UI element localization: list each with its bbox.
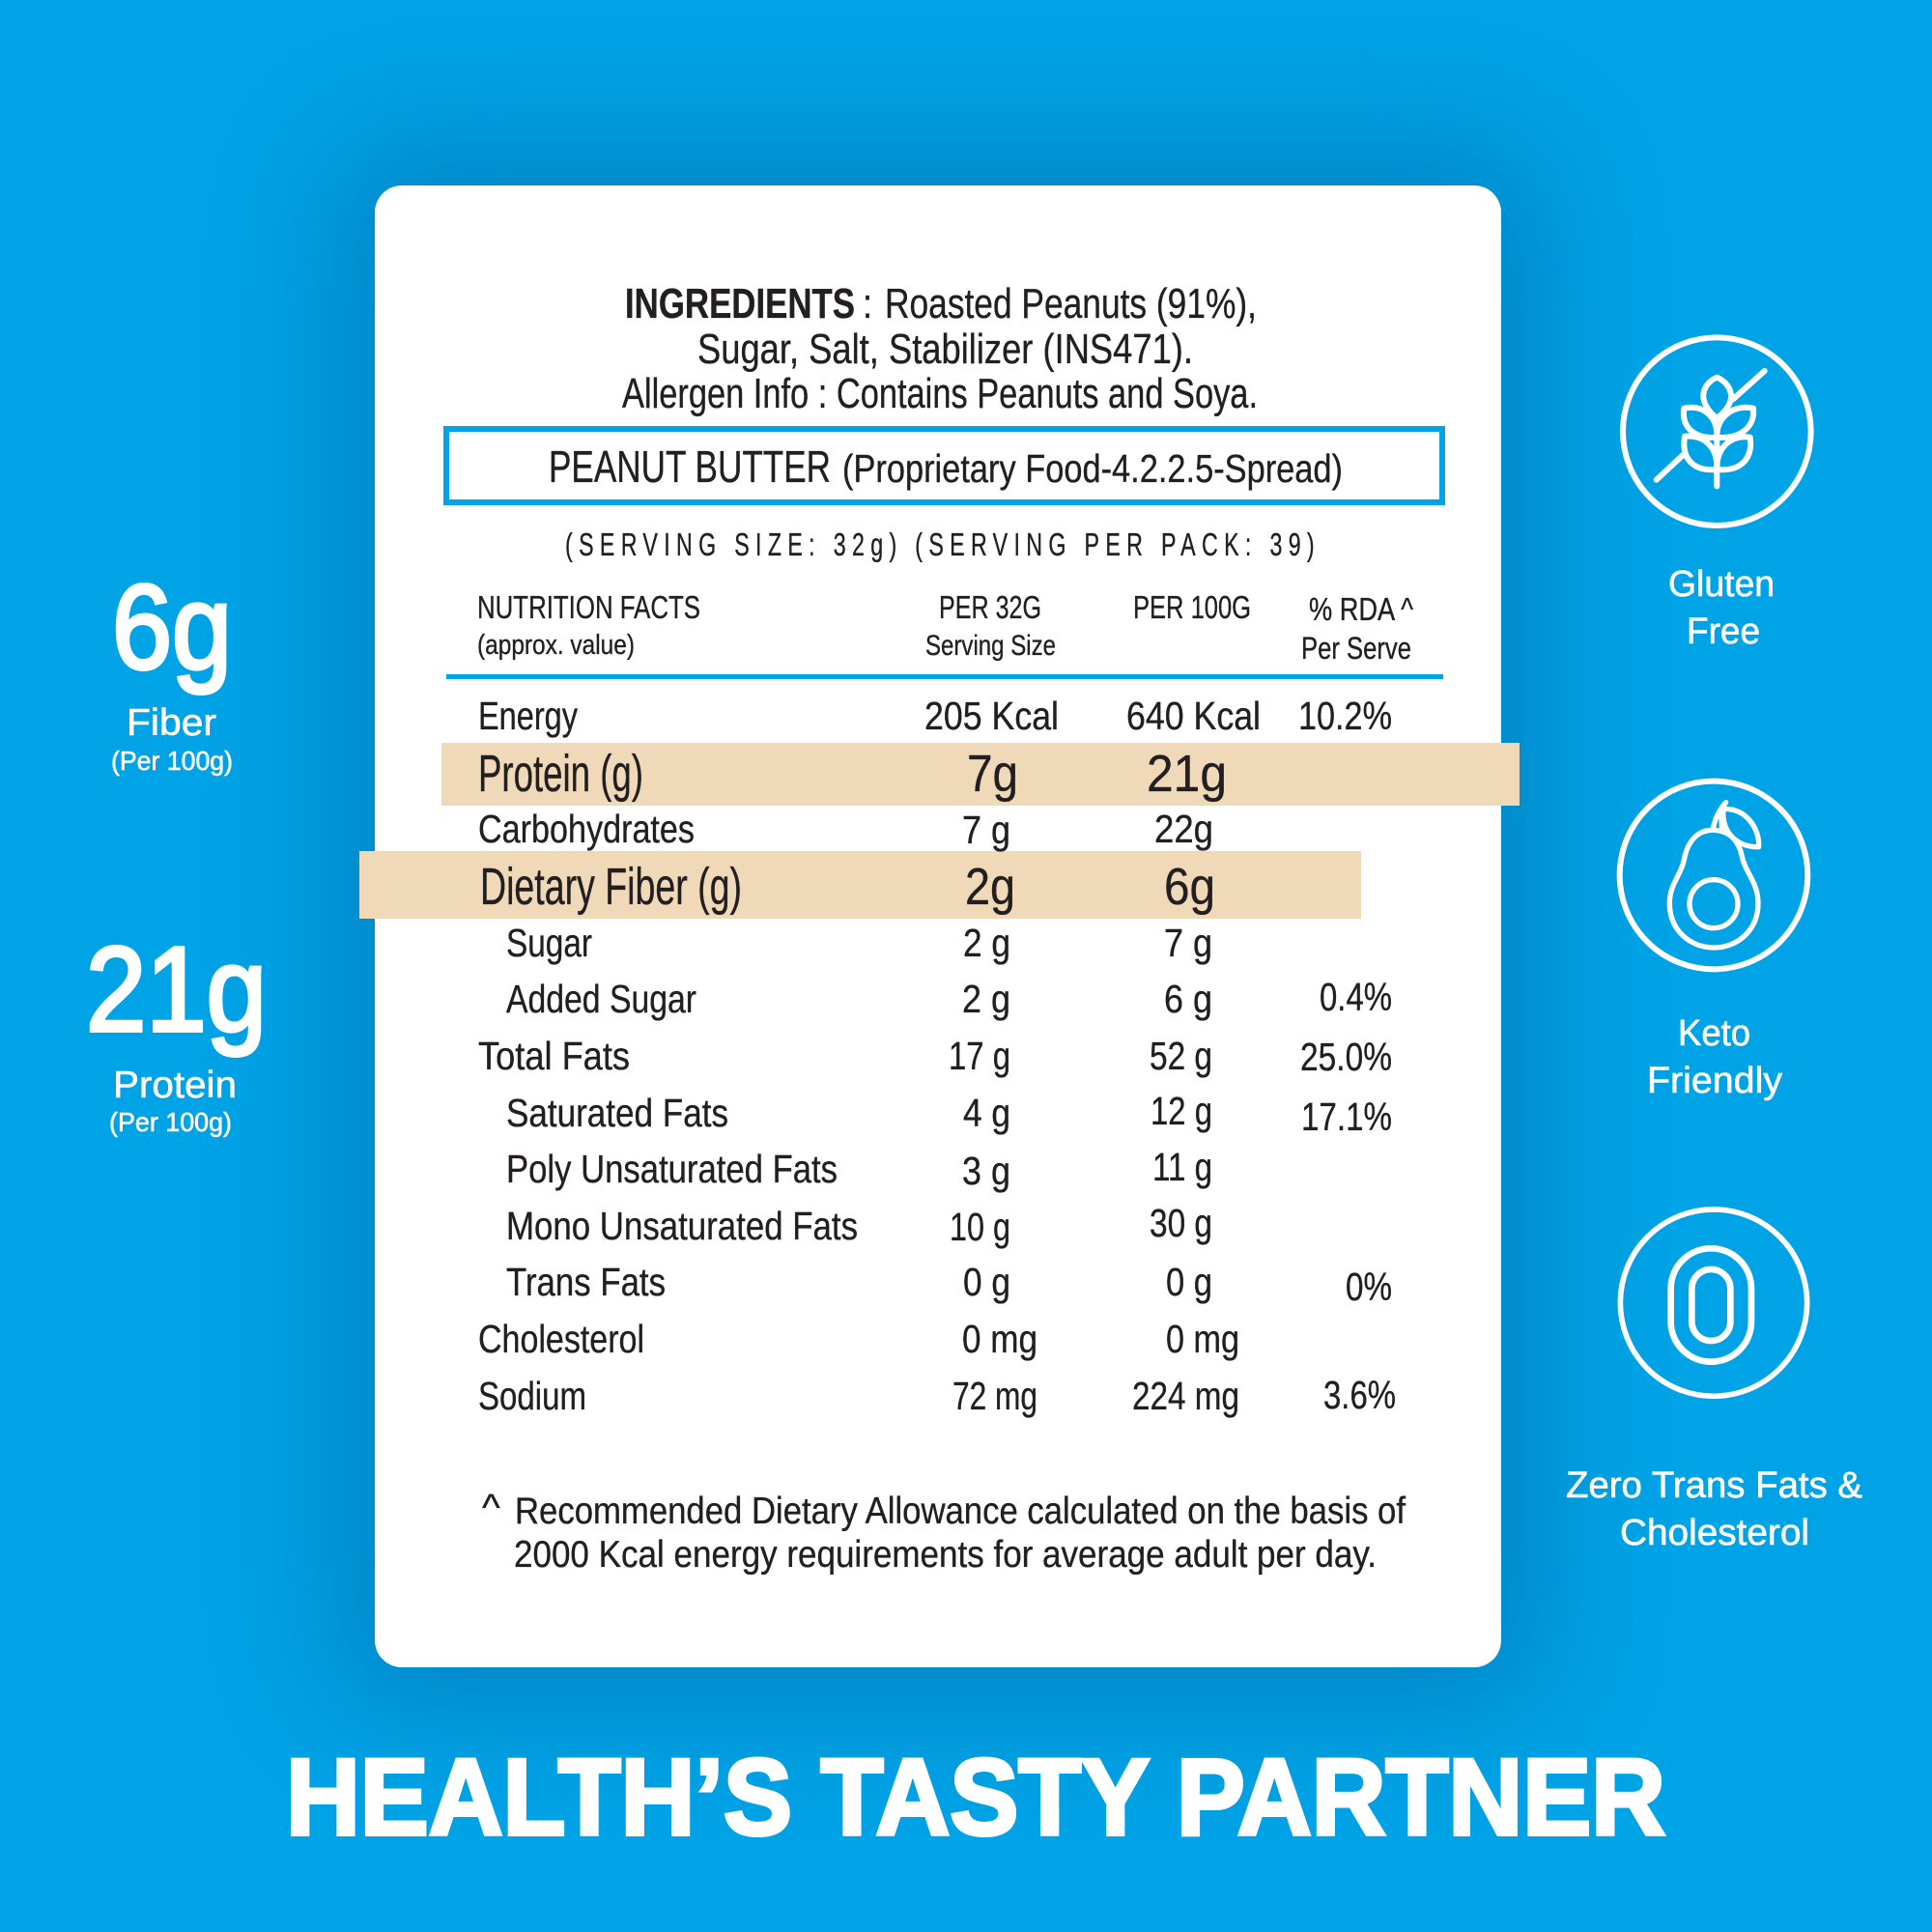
row: sugar	[506, 921, 1212, 965]
row: mono unsaturated fats: 10 g	[950, 1205, 1010, 1249]
row: poly unsaturated fats: 3 g	[962, 1149, 1010, 1193]
row: mono unsaturated fats: 30 g	[1150, 1201, 1212, 1245]
icon: gluten free	[1623, 337, 1811, 526]
stat: 21g protein: Protein	[113, 1065, 237, 1106]
row: mono unsaturated fats: Mono Unsaturated Fats	[506, 1204, 858, 1248]
table header: (approx. value)	[477, 630, 635, 661]
label: zero trans fats and cholesterol: Cholesterol	[1620, 1513, 1809, 1553]
row: cholesterol: 0 mg	[1166, 1317, 1239, 1361]
row: total fats: 52 g	[1150, 1034, 1212, 1078]
ingredients text block: Roasted Peanuts (91%),	[885, 280, 1257, 327]
row: saturated fats: 12 g	[1151, 1089, 1212, 1133]
row: added sugar: 2 g	[962, 977, 1010, 1021]
ingredients text block: :	[863, 280, 872, 327]
ingredients text block: INGREDIENTS	[625, 280, 855, 327]
label: gluten free: Gluten	[1668, 564, 1775, 605]
row: protein: Protein (g)	[478, 745, 643, 803]
table header	[446, 589, 1443, 679]
stat: 21g protein	[86, 923, 267, 1137]
row: trans fats	[506, 1260, 1392, 1309]
row: energy: 205 Kcal	[924, 694, 1059, 738]
stat: 6g fiber: (Per 100g)	[111, 746, 233, 776]
table header: PER 100G	[1133, 589, 1251, 625]
icon: zero trans fats	[1620, 1209, 1807, 1396]
row: trans fats: 0 g	[963, 1260, 1010, 1304]
footnote	[482, 1487, 1406, 1576]
row: poly unsaturated fats	[506, 1145, 1212, 1193]
row: cholesterol: 0 mg	[962, 1317, 1037, 1361]
row: saturated fats	[506, 1089, 1392, 1139]
table rows	[478, 694, 1396, 1418]
row: sodium: Sodium	[478, 1374, 586, 1418]
label: gluten free: Free	[1687, 611, 1760, 652]
label: gluten free	[1668, 564, 1775, 652]
title: HEALTH’S TASTY PARTNER	[286, 1737, 1665, 1858]
row: protein: 21g	[1147, 745, 1227, 803]
row: carbohydrates	[478, 807, 1213, 852]
product title box: PEANUT BUTTER	[549, 441, 831, 492]
row: trans fats: 0%	[1346, 1264, 1392, 1309]
row: dietary fiber: 2g	[965, 858, 1015, 916]
serving size line: (SERVING SIZE: 32g) (SERVING PER PACK: 39)	[565, 526, 1321, 562]
table header: PER 32G	[939, 589, 1041, 625]
row: energy: 640 Kcal	[1126, 694, 1261, 738]
product title box	[446, 429, 1442, 502]
row: carbohydrates: 22g	[1154, 807, 1213, 851]
row: total fats: Total Fats	[478, 1034, 630, 1078]
row: carbohydrates: Carbohydrates	[478, 807, 695, 851]
row: cholesterol	[478, 1317, 1239, 1361]
icon: keto avocado	[1620, 781, 1807, 969]
row: trans fats: Trans Fats	[506, 1260, 666, 1304]
row: sugar: Sugar	[506, 921, 592, 965]
ingredients text block: Allergen Info : Contains Peanuts and Soya.	[622, 370, 1258, 417]
row: added sugar: 0.4%	[1320, 975, 1392, 1019]
footnote: 2000 Kcal energy requirements for average adult per day.	[514, 1534, 1377, 1576]
stat: 21g protein: (Per 100g)	[109, 1107, 232, 1137]
row: sodium: 3.6%	[1323, 1373, 1396, 1417]
stat: 6g fiber: 6g	[112, 561, 232, 695]
stat: 21g protein: 21g	[86, 923, 267, 1057]
row: sugar: 2 g	[963, 921, 1010, 965]
highlight band: dietary fiber	[359, 851, 1361, 919]
stat: 6g fiber: Fiber	[127, 702, 216, 744]
row: protein: 7g	[967, 745, 1018, 803]
row: energy	[478, 694, 1392, 738]
row: added sugar	[506, 975, 1392, 1021]
stat: 6g fiber	[111, 561, 233, 776]
row: dietary fiber	[480, 858, 1215, 916]
row: saturated fats: Saturated Fats	[506, 1091, 728, 1135]
row: mono unsaturated fats	[506, 1201, 1212, 1249]
row: added sugar: Added Sugar	[506, 977, 696, 1021]
row: sodium: 72 mg	[952, 1374, 1037, 1418]
row: total fats: 25.0%	[1300, 1035, 1392, 1079]
row: poly unsaturated fats: Poly Unsaturated Fats	[506, 1147, 838, 1191]
row: energy: 10.2%	[1298, 694, 1392, 738]
highlight band: protein	[441, 743, 1520, 806]
label: keto friendly: Friendly	[1647, 1061, 1782, 1101]
row: carbohydrates: 7 g	[962, 808, 1010, 852]
row: energy: Energy	[478, 694, 578, 738]
row: added sugar: 6 g	[1164, 977, 1212, 1021]
product title box: (Proprietary Food-4.2.2.5-Spread)	[842, 446, 1343, 491]
row: trans fats: 0 g	[1166, 1260, 1212, 1304]
row: saturated fats: 4 g	[963, 1091, 1010, 1135]
table header: Per Serve	[1301, 631, 1411, 666]
row: sugar: 7 g	[1164, 921, 1212, 965]
row: dietary fiber: Dietary Fiber (g)	[480, 858, 742, 916]
table header: Serving Size	[925, 630, 1056, 662]
label: keto friendly: Keto	[1678, 1013, 1750, 1054]
table header: NUTRITION FACTS	[477, 589, 700, 625]
row: dietary fiber: 6g	[1164, 858, 1215, 916]
row: cholesterol: Cholesterol	[478, 1317, 644, 1361]
row: saturated fats: 17.1%	[1301, 1094, 1392, 1139]
row: sodium	[478, 1373, 1396, 1418]
panel: nutrition card	[375, 185, 1501, 1667]
label: zero trans fats and cholesterol: Zero Trans Fats &	[1566, 1465, 1862, 1506]
footnote: Recommended Dietary Allowance calculated on the basis of	[515, 1491, 1406, 1532]
row: total fats: 17 g	[949, 1034, 1010, 1078]
ingredients text block	[622, 280, 1258, 417]
row: sodium: 224 mg	[1132, 1374, 1239, 1418]
row: total fats	[478, 1034, 1392, 1079]
table header: % RDA ^	[1309, 591, 1413, 627]
label: keto friendly	[1647, 1013, 1782, 1101]
label: zero trans fats and cholesterol	[1566, 1465, 1862, 1553]
row: protein	[478, 745, 1227, 803]
footnote: ^	[482, 1487, 500, 1529]
row: poly unsaturated fats: 11 g	[1152, 1145, 1212, 1189]
ingredients text block: Sugar, Salt, Stabilizer (INS471).	[697, 326, 1193, 373]
